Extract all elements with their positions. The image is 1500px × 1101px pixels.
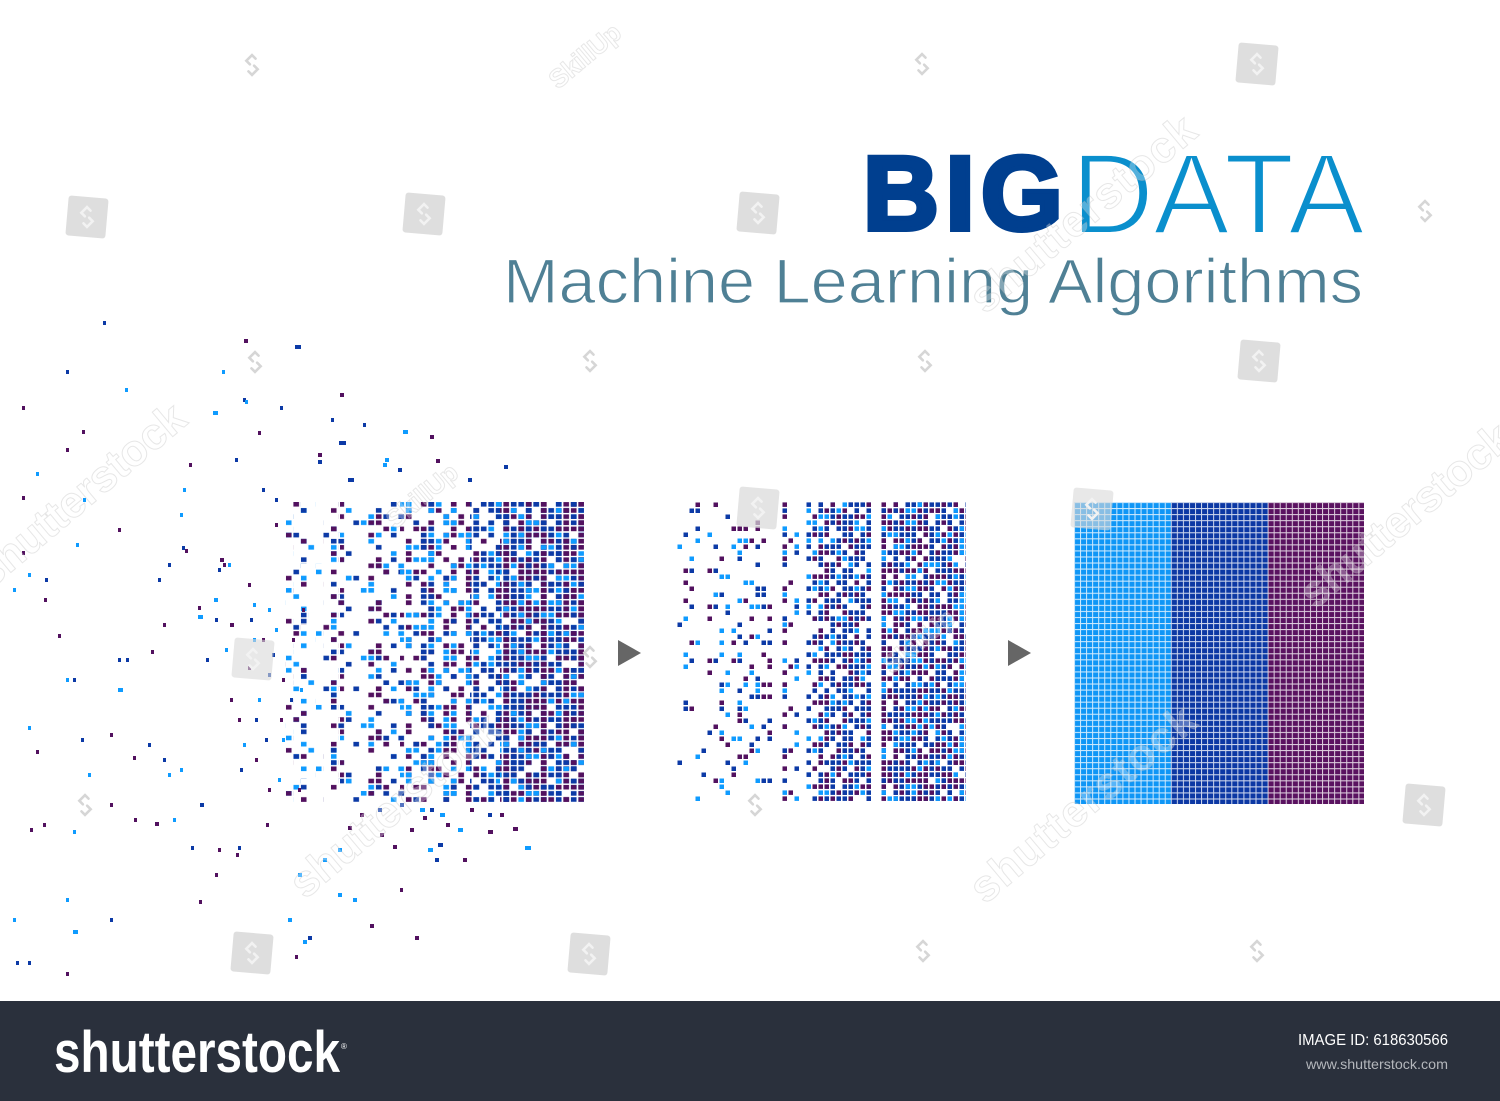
watermark text: shutterstock (960, 695, 1206, 913)
scattered purple particles (22, 341, 518, 974)
arrow: step one to step two (618, 640, 641, 666)
navy column (1171, 502, 1268, 804)
dense column (881, 502, 966, 802)
purple column (1268, 502, 1364, 804)
watermark text: SkillUp (543, 17, 627, 95)
watermark icons on squares (77, 54, 1434, 964)
image id: IMAGE ID: 618630566 (1298, 1032, 1448, 1049)
watermark squares (65, 42, 1446, 976)
panel: fully sorted data columns (1074, 502, 1364, 804)
light blue column (1074, 502, 1171, 804)
panel: partially sorted data (678, 502, 966, 802)
medium column (782, 502, 872, 802)
title: Big Data (863, 130, 1365, 258)
watermark text: shutterstock (280, 703, 511, 908)
loose watermark icons (75, 54, 1435, 961)
grid lines (1074, 502, 1364, 804)
website: www.shutterstock.com (1305, 1056, 1448, 1072)
panel: scattered data dissolving into a grid (13, 323, 584, 974)
subtitle: Machine Learning Algorithms (503, 247, 1363, 317)
title: Big Data: BIG (863, 136, 1063, 252)
scattered navy particles (16, 323, 508, 963)
title: Big Data: DATA (1071, 130, 1365, 258)
watermark text: SkillUp (877, 602, 961, 680)
scattered light-blue particles (13, 372, 531, 942)
footer bar (0, 1001, 1500, 1101)
registered mark: ® (341, 1042, 347, 1051)
arrow: step two to step three (1008, 640, 1031, 666)
dense data grid (285, 502, 584, 802)
footer logo: shutterstock (54, 1020, 341, 1085)
sparse column (678, 505, 772, 799)
watermark text: SkillUp (380, 457, 464, 535)
watermark text: shutterstock (960, 105, 1206, 323)
